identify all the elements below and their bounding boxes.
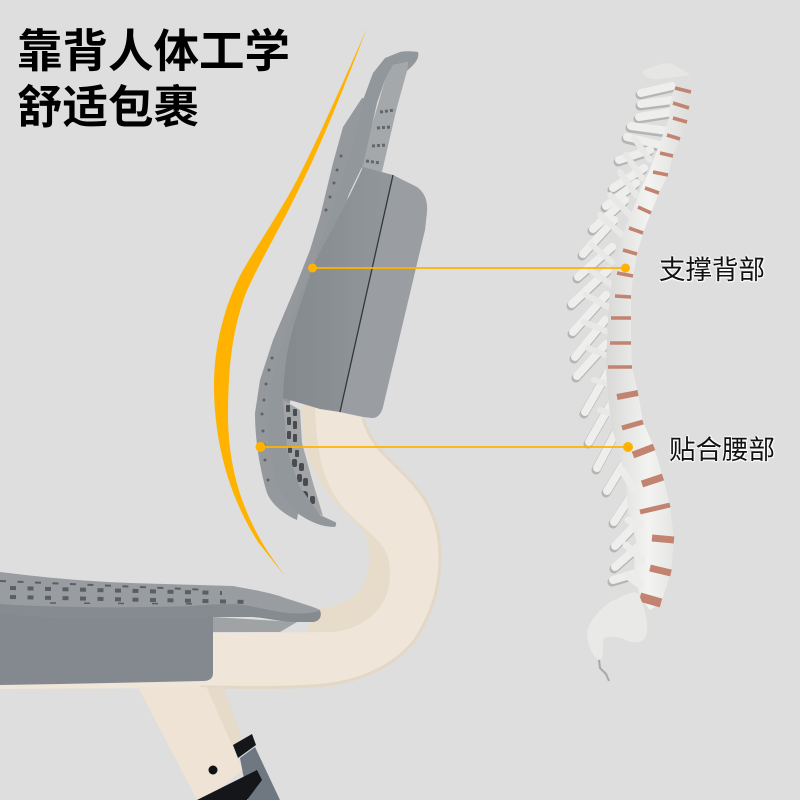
title: 靠背人体工学 [17, 26, 290, 77]
callout line: lumbar support [256, 442, 633, 452]
rear leg tube [207, 687, 243, 770]
front frame tube [0, 408, 441, 689]
title [17, 26, 290, 133]
leg adjustment hole [208, 766, 218, 774]
label: lumbar fit: 贴合腰部 [669, 435, 775, 465]
atlas vertebra [642, 63, 690, 79]
seat top surface [0, 572, 321, 622]
rear frame tube [300, 405, 395, 640]
ergonomic curve swoosh [214, 28, 367, 575]
coccyx [599, 660, 609, 681]
vertebral column [606, 86, 691, 610]
callout line: back support [308, 264, 630, 272]
upper leg clip [233, 734, 256, 758]
lower leg tube [240, 747, 280, 800]
spinous processes [584, 138, 650, 416]
panel seam [340, 175, 393, 412]
seat underside block [0, 613, 213, 685]
upper backrest panel and mesh [360, 62, 408, 172]
sacrum [587, 592, 647, 659]
backrest centre panel [283, 167, 393, 412]
lower backrest mesh [283, 400, 323, 516]
backrest [255, 51, 427, 527]
spine [571, 63, 691, 681]
seat underside mesh [213, 617, 297, 632]
intervertebral discs [608, 88, 691, 603]
backrest outer box [340, 175, 427, 418]
seat holes [0, 581, 248, 604]
seat front lip [0, 604, 321, 622]
lumbar facet joints [622, 470, 642, 585]
backrest edge holes [260, 154, 342, 482]
upper leg tube [138, 687, 243, 800]
front tube outer shading [200, 418, 440, 688]
upper mesh holes [366, 110, 395, 163]
label: back support: 支撑背部 [659, 255, 765, 285]
backrest rim band [268, 51, 418, 527]
title: 舒适包裹 [17, 82, 199, 133]
lower leg clip [197, 770, 262, 800]
lower mesh holes [286, 405, 315, 504]
transverse processes [572, 86, 672, 580]
seat [0, 572, 321, 685]
chair frame [0, 405, 441, 800]
process shadows [571, 88, 671, 582]
backrest rear shell [255, 98, 372, 520]
